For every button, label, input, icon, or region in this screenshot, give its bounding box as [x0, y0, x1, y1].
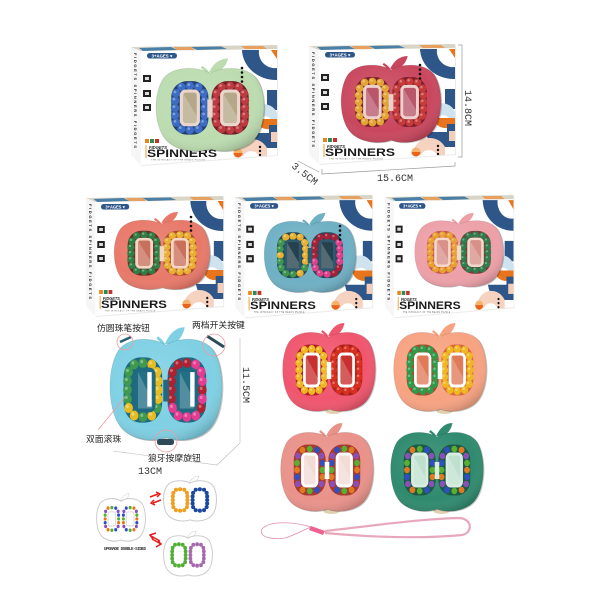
box packaging: FIDGETS SPINNERS FIDGETS — [88, 204, 93, 299]
arrows: swap upper — [150, 492, 161, 505]
box packaging: FIDGETS — [252, 297, 269, 302]
product box: green apple — [131, 45, 278, 166]
apple: red — [283, 323, 376, 414]
mini apple: green and purple — [164, 531, 212, 576]
box packaging: FIDGETS SPINNERS FIDGETS — [133, 53, 138, 148]
box packaging: FIDGETS SPINNERS FIDGETS — [387, 203, 390, 301]
label: massage knob: 狼牙按摩旋钮 — [148, 452, 201, 463]
apple toy: coral with green and amber beads — [114, 212, 211, 290]
product box: coral apple — [86, 196, 224, 317]
mini apple: orange and navy — [164, 476, 216, 521]
box packaging: THE INTRICACY OF THE BEADS PUZZLE — [151, 158, 206, 162]
box packaging: 3+AGES ♥ — [105, 204, 125, 209]
box packaging: THE INTRICACY OF THE BEADS PUZZLE — [403, 311, 451, 314]
switch: two-stage — [207, 336, 224, 347]
dimension lines — [113, 338, 240, 465]
box packaging: THE INTRICACY OF THE BEADS PUZZLE — [329, 158, 384, 160]
product box: teal apple — [235, 195, 373, 318]
box packaging: SPINNERS — [147, 148, 217, 160]
label: two-stage switch: 两档开关按键 — [192, 319, 245, 330]
apple toy: pink with amber and green beads — [415, 213, 504, 288]
apple: orange — [394, 323, 487, 414]
dimension: box height 14.8CM — [458, 45, 472, 157]
box packaging: 3+AGES ♥ — [403, 203, 422, 209]
callout circles and leader — [98, 334, 225, 452]
apple: dusty pink — [281, 423, 374, 514]
box packaging: 3+AGES ♥ — [330, 52, 351, 57]
box packaging: 3+AGES ♥ — [152, 53, 173, 58]
box packaging: FIDGETS — [149, 145, 167, 150]
window slits — [147, 372, 195, 407]
dimension: box height 14.8CM: 14.8CM — [461, 90, 472, 126]
button: pen clicker — [120, 337, 131, 342]
box packaging — [86, 196, 224, 317]
box packaging: FIDGETS SPINNERS FIDGETS — [311, 52, 316, 147]
box packaging: THE INTRICACY OF THE BEADS PUZZLE — [254, 311, 305, 314]
box packaging: FIDGETS — [103, 296, 120, 301]
dimension: 11.5CM: 11.5CM — [239, 367, 250, 403]
box packaging — [385, 195, 514, 318]
dimension: box width 15.6CM — [322, 162, 455, 185]
box packaging: FIDGETS SPINNERS FIDGETS — [237, 203, 242, 300]
box packaging: SPINNERS — [325, 147, 395, 159]
apple toy: crimson with amber and red beads — [341, 56, 442, 143]
box packaging: SPINNERS — [101, 299, 167, 311]
box packaging — [131, 45, 278, 166]
caption: UPGRADE DOUBLE-SIDED — [104, 548, 146, 552]
box packaging: THE INTRICACY OF THE BEADS PUZZLE — [105, 309, 156, 313]
dimension: 13CM: 13CM — [138, 467, 162, 478]
product box: crimson apple — [309, 44, 456, 165]
apple toy: green with blue and red beads — [156, 59, 265, 152]
box packaging: FIDGETS — [327, 144, 345, 149]
product box: pink apple — [385, 195, 514, 318]
apple toy: large blue — [110, 327, 223, 441]
apple: green — [391, 423, 484, 514]
apple toy: teal with multicolour beads — [264, 213, 357, 293]
arrows: swap lower — [150, 533, 161, 547]
label: pen button: 仿圆珠笔按钮 — [97, 322, 150, 333]
box packaging: 3+AGES ♥ — [254, 203, 274, 209]
mini diagram: double-sided upgrade — [97, 476, 216, 576]
box packaging: SPINNERS — [399, 301, 461, 312]
mini apple: mixed colours — [97, 494, 145, 541]
box packaging — [235, 195, 373, 318]
box packaging: SPINNERS — [250, 300, 316, 312]
knob: spiked massage — [157, 439, 174, 445]
box packaging: FIDGETS — [401, 297, 417, 302]
dimension: box depth 3.5CM: 3.5CM — [289, 161, 319, 189]
main product: blue apple with callouts — [86, 319, 250, 478]
dimension: box width 15.6CM: 15.6CM — [377, 174, 413, 185]
label: double-sided beads: 双面滚珠 — [86, 433, 121, 444]
wrist strap — [261, 518, 470, 539]
box packaging — [309, 44, 456, 165]
